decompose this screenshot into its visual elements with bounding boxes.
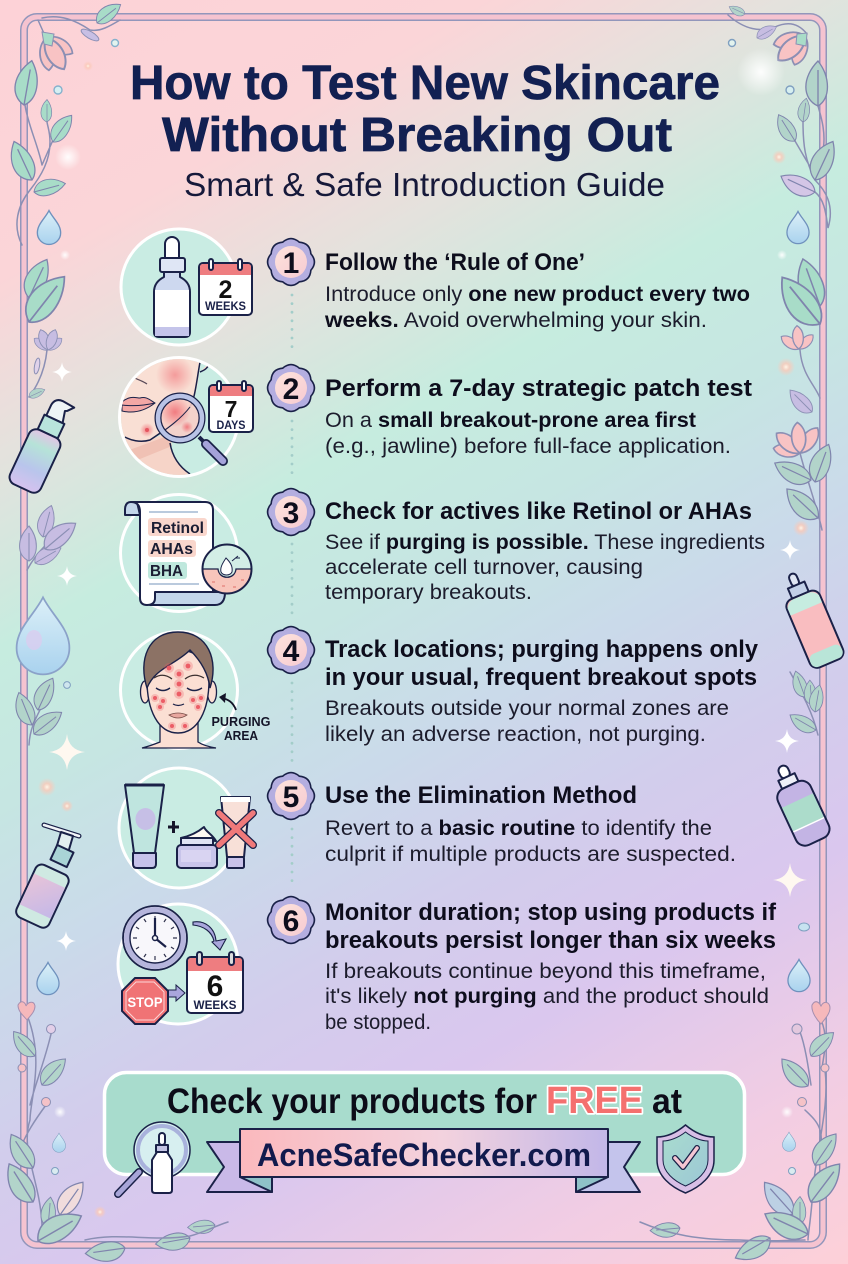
step 3 text: accelerate cell turnover, causing [325,555,643,579]
step 4 illustration: face with purging area [120,632,270,748]
step 5 badge [268,773,314,819]
step 4 text: Track locations; purging happens only [325,636,759,663]
step 6 text [325,899,777,1034]
step 1 badge: 1 [283,247,299,280]
step 1 illustration: dropper bottle and calendar: 2 [219,276,232,304]
floral border: bottom right [640,1002,848,1264]
dotted connectors [291,295,293,882]
water drop: upper left [37,211,61,244]
step 1 illustration: dropper bottle and calendar: WEEKS [205,299,246,313]
title [130,57,720,162]
step 2 text: Perform a 7-day strategic patch test [325,375,752,402]
pump bottle: upper left [7,394,78,495]
step 2 illustration: face with magnifier and calendar: DAYS [216,418,246,432]
step 1 text: Introduce only one new product every two [325,282,750,306]
step 4 text: likely an adverse reaction, not purging. [325,722,706,746]
title: How to Test New Skincare [130,57,720,110]
step 1 illustration: dropper bottle and calendar [121,229,252,345]
step 6 badge [268,897,314,943]
step 5 text: Revert to a basic routine to identify the [325,816,712,840]
step 6 text: it's likely not purging and the product should [325,984,769,1008]
step 6 illustration: clock, stop sign and calendar: WEEKS [194,998,236,1012]
water drop: upper right [787,211,809,244]
step 5 text [325,782,736,866]
icon: magnifier with bottle [118,1122,190,1194]
step 6 text: If breakouts continue beyond this timeframe, [325,959,766,983]
call to action panel [104,1072,744,1194]
step 2 text: (e.g., jawline) before full-face application. [325,434,731,458]
pump bottle: lower left [14,825,79,930]
step 6 text: be stopped. [325,1010,431,1034]
step 3 text: Check for actives like Retinol or AHAs [325,498,752,525]
step 3 badge [268,489,314,535]
step 5 text: culprit if multiple products are suspected. [325,842,736,866]
step 3 illustration: ingredient scroll [120,494,254,612]
step 6 illustration: clock, stop sign and calendar: STOP [128,994,162,1010]
water drops and dot: lower right [788,923,810,992]
step 1 text: Follow the ‘Rule of One’ [325,249,585,276]
step 6 badge: 6 [283,905,299,938]
step 3 text: See if purging is possible. These ingredients [325,530,765,554]
step 5 badge: 5 [283,781,299,814]
step 2 badge: 2 [283,373,299,406]
step 6 illustration: clock, stop sign and calendar [118,904,243,1024]
step 4 text: in your usual, frequent breakout spots [325,664,757,691]
call to action text: FREE [546,1080,643,1122]
step 4 text [325,636,759,746]
floral border: middle left [10,503,81,745]
step 2 text: On a small breakout-prone area first [325,408,696,432]
title: Without Breaking Out [162,109,672,162]
ribbon banner [207,1129,640,1192]
step 4 illustration: face with purging area: AREA [224,728,259,743]
step 1 badge [268,239,314,285]
step 4 badge: 4 [283,635,300,668]
step 3 text [325,498,765,604]
ribbon banner: AcneSafeChecker.com [257,1137,591,1173]
call to action text: at [652,1082,682,1121]
water drop: lower left [37,962,59,995]
step 1 text: weeks. Avoid overwhelming your skin. [324,308,707,332]
step 4 illustration: face with purging area: PURGING [212,714,270,729]
floral border: bottom left [0,1002,228,1264]
step 5 text: Use the Elimination Method [325,782,637,809]
step 4 badge [268,627,314,673]
step 2 badge [268,365,314,411]
icon: shield with check [657,1125,714,1193]
subtitle: Smart & Safe Introduction Guide [184,166,665,203]
step 1 text [324,249,750,332]
step 3 illustration: ingredient scroll: AHAs [150,541,193,558]
step 2 text [325,375,752,458]
step 3 text: temporary breakouts. [325,580,532,604]
step 2 illustration: face with magnifier and calendar [118,355,253,480]
floral border: top left [4,0,125,400]
dropper bottle: lower right [765,759,833,849]
call to action text: Check your products for [167,1082,537,1121]
step 6 illustration: clock, stop sign and calendar: 6 [207,970,223,1003]
step 3 illustration: ingredient scroll: Retinol [151,520,204,537]
floral border: top right [727,3,841,530]
step 2 illustration: face with magnifier and calendar: 7 [225,396,237,422]
floral border: middle right [786,669,825,737]
step 5 illustration: products elimination [119,768,253,888]
step 3 badge: 3 [283,497,299,530]
water drop: large left [17,597,69,674]
step 4 text: Breakouts outside your normal zones are [325,696,729,720]
dropper bottle: upper right [775,567,846,670]
step 3 illustration: ingredient scroll: BHA [150,563,183,580]
step 6 text: Monitor duration; stop using products if [325,899,777,926]
step 6 text: breakouts persist longer than six weeks [325,927,776,954]
